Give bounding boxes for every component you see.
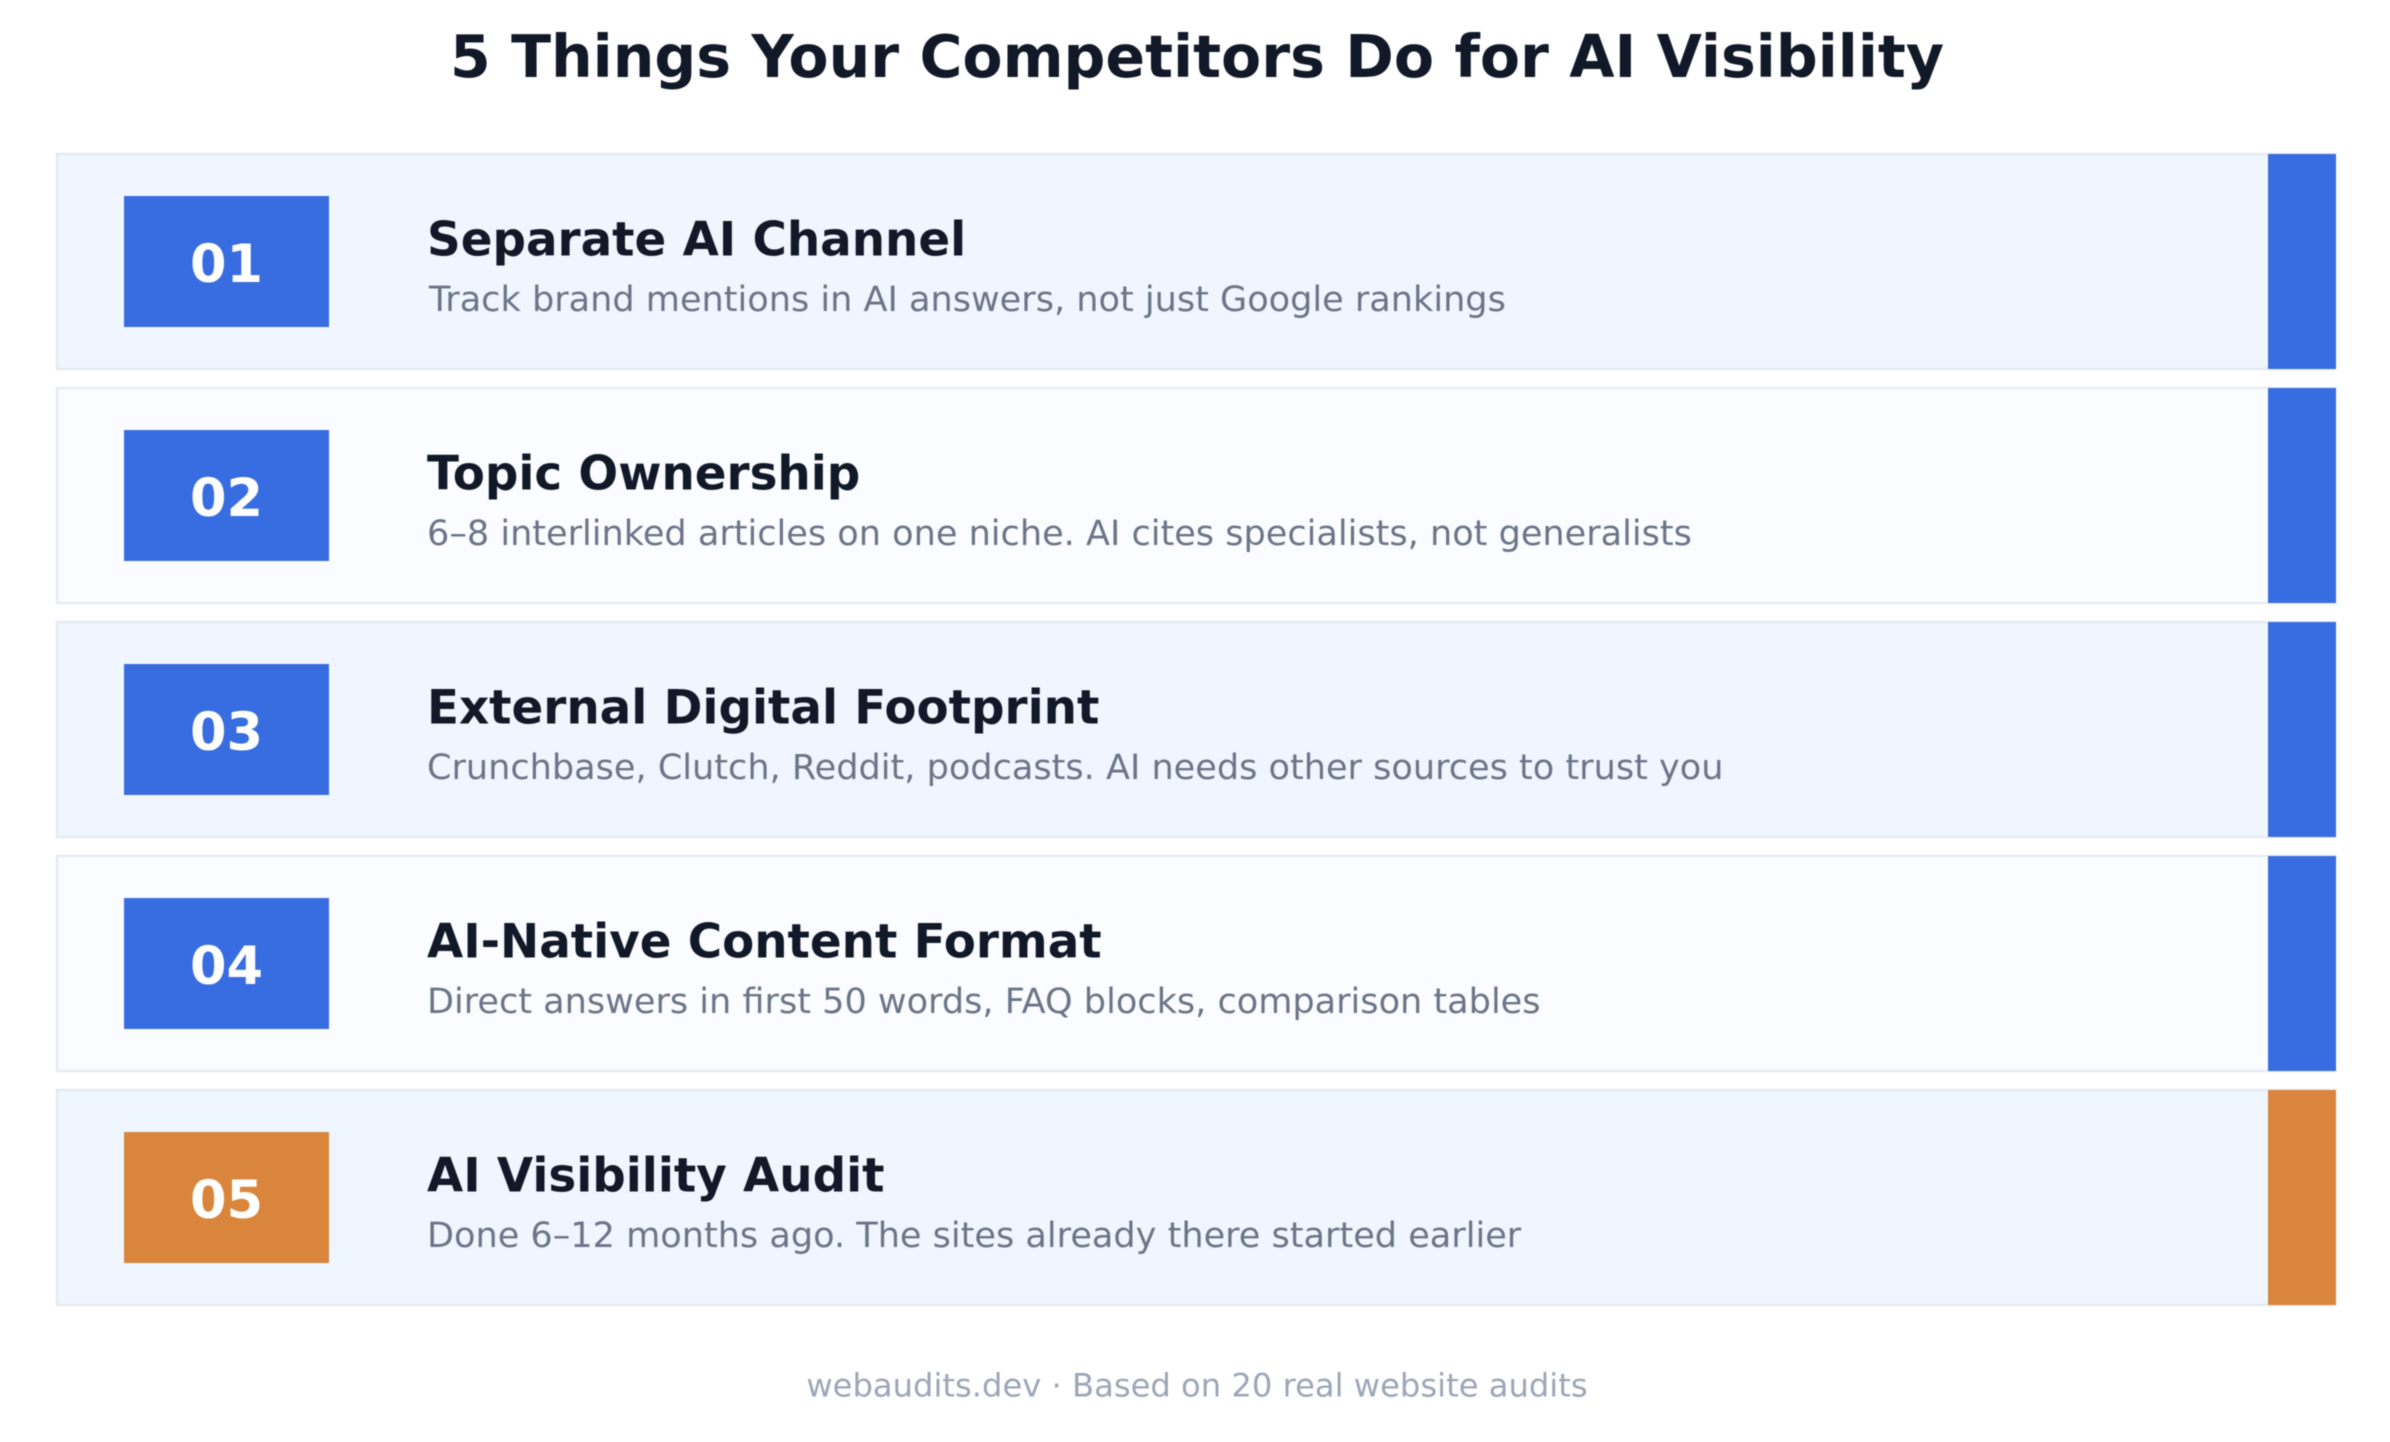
panel: item 01 <box>57 154 2336 369</box>
description 03: Crunchbase, Clutch, Reddit, podcasts. AI needs other sources to trust you <box>427 747 1723 788</box>
heading 05: AI Visibility Audit <box>427 1150 884 1204</box>
description 05: Done 6–12 months ago. The sites already there started earlier <box>427 1215 1522 1256</box>
accent bar 05 <box>2268 1090 2336 1305</box>
panel: item 04 <box>57 856 2336 1071</box>
badge 05 <box>124 1132 329 1263</box>
footer: webaudits.dev · Based on 20 real website audits <box>806 1366 1588 1404</box>
heading 02: Topic Ownership <box>427 448 860 502</box>
badge 05: 05 <box>190 1170 263 1231</box>
badge 03 <box>124 664 329 795</box>
badge 04: 04 <box>190 936 263 997</box>
panel: item 02 <box>57 388 2336 603</box>
panel: item 03 <box>57 622 2336 837</box>
badge 04 <box>124 898 329 1029</box>
title: 5 Things Your Competitors Do for AI Visibility <box>450 23 1944 91</box>
heading 04: AI-Native Content Format <box>427 916 1102 970</box>
accent bar 02 <box>2268 388 2336 603</box>
accent bar 04 <box>2268 856 2336 1071</box>
badge 01 <box>124 196 329 327</box>
panel: item 05 <box>57 1090 2336 1305</box>
badge 02: 02 <box>190 468 263 529</box>
badge 03: 03 <box>190 702 263 763</box>
description 02: 6–8 interlinked articles on one niche. AI cites specialists, not generalists <box>427 513 1692 554</box>
accent bar 03 <box>2268 622 2336 837</box>
heading 03: External Digital Footprint <box>427 682 1099 736</box>
badge 02 <box>124 430 329 561</box>
badge 01: 01 <box>190 234 263 295</box>
description 01: Track brand mentions in AI answers, not just Google rankings <box>428 279 1506 320</box>
heading 01: Separate AI Channel <box>427 214 966 268</box>
accent bar 01 <box>2268 154 2336 369</box>
description 04: Direct answers in first 50 words, FAQ blocks, comparison tables <box>427 981 1541 1022</box>
